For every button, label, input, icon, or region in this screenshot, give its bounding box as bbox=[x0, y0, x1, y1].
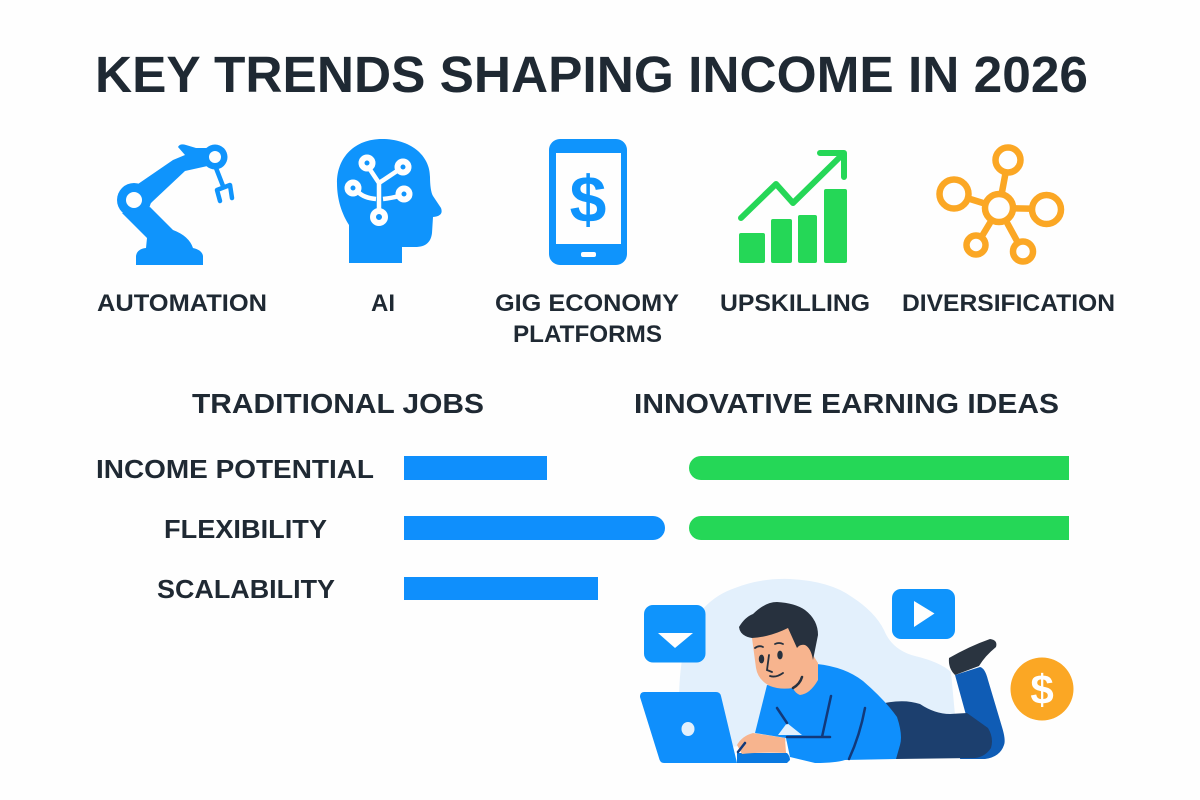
label: upskilling: UPSKILLING bbox=[720, 290, 870, 317]
sweater body bbox=[755, 664, 901, 763]
pants bbox=[880, 701, 992, 759]
bar: flexibility traditional bbox=[404, 516, 665, 540]
heading: traditional jobs: TRADITIONAL JOBS bbox=[192, 388, 484, 419]
background blob bbox=[679, 579, 955, 750]
head and neck bbox=[752, 625, 818, 695]
coin: dollar bbox=[1010, 658, 1074, 720]
label: gig economy platforms: GIG ECONOMY bbox=[495, 290, 679, 317]
icon: diversification network bbox=[940, 148, 1061, 262]
label: AI: AI bbox=[371, 290, 395, 317]
coin: dollar: $ bbox=[1030, 666, 1054, 713]
icon: AI head bbox=[337, 139, 442, 263]
row label: income potential: INCOME POTENTIAL bbox=[96, 454, 374, 484]
icon: phone with dollar: $ bbox=[570, 162, 606, 236]
bar: scalability traditional bbox=[404, 577, 598, 600]
hair bbox=[739, 602, 818, 660]
laptop bbox=[640, 692, 790, 763]
tile: dropdown bbox=[644, 605, 706, 662]
title: KEY TRENDS SHAPING INCOME IN 2026 bbox=[95, 46, 1088, 103]
label: automation: AUTOMATION bbox=[97, 290, 267, 317]
icon: phone with dollar bbox=[549, 139, 627, 265]
row label: scalability: SCALABILITY bbox=[157, 574, 335, 604]
label: gig economy platforms: PLATFORMS bbox=[513, 321, 662, 348]
heading: innovative earning ideas: INNOVATIVE EARNING IDEAS bbox=[634, 388, 1059, 419]
illustration: person on laptop bbox=[640, 579, 1074, 763]
bar: flexibility innovative bbox=[689, 516, 1069, 540]
icon: growth chart bbox=[739, 153, 847, 263]
bar: income potential innovative bbox=[689, 456, 1069, 480]
row label: flexibility: FLEXIBILITY bbox=[164, 514, 327, 544]
gap under arm bbox=[778, 723, 802, 735]
label: gig economy platforms bbox=[495, 290, 679, 348]
bar: income potential traditional bbox=[404, 456, 547, 480]
face details bbox=[755, 643, 802, 688]
label: diversification: DIVERSIFICATION bbox=[902, 290, 1115, 317]
sock bbox=[949, 639, 996, 675]
lower leg bbox=[955, 667, 1005, 759]
tile: play bbox=[892, 589, 955, 639]
sleeve creases bbox=[738, 696, 865, 759]
hand bbox=[737, 733, 786, 754]
icon: robot arm bbox=[117, 144, 232, 265]
